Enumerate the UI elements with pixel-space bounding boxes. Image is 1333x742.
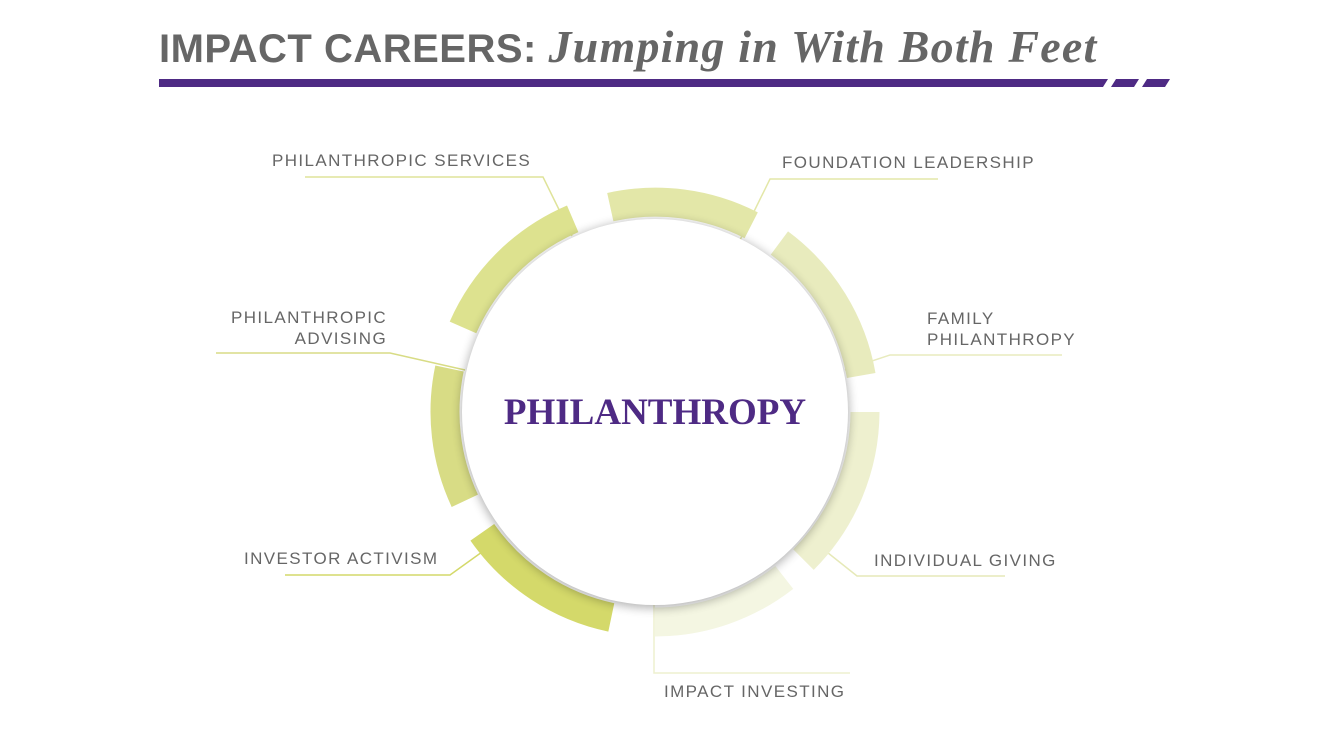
center circle bbox=[461, 219, 849, 608]
title: IMPACT CAREERS: Jumping in With Both Feet bbox=[159, 21, 1097, 72]
label: philanthropic services: PHILANTHROPIC SERVICES bbox=[272, 151, 531, 170]
leader lines bbox=[216, 177, 1062, 673]
label: philanthropic advising bbox=[231, 308, 387, 348]
label: family philanthropy: PHILANTHROPY bbox=[927, 330, 1076, 349]
label: philanthropic advising: PHILANTHROPIC bbox=[231, 308, 387, 327]
label: family philanthropy bbox=[927, 309, 1076, 349]
label: foundation leadership: FOUNDATION LEADERSHIP bbox=[782, 153, 1035, 172]
label: family philanthropy: FAMILY bbox=[927, 309, 995, 328]
label: investor activism: INVESTOR ACTIVISM bbox=[244, 549, 438, 568]
label: philanthropic advising: ADVISING bbox=[295, 329, 387, 348]
ring segments bbox=[445, 202, 865, 622]
center circle: PHILANTHROPY bbox=[504, 392, 806, 433]
label: impact investing: IMPACT INVESTING bbox=[664, 682, 845, 701]
label: individual giving: INDIVIDUAL GIVING bbox=[874, 551, 1057, 570]
